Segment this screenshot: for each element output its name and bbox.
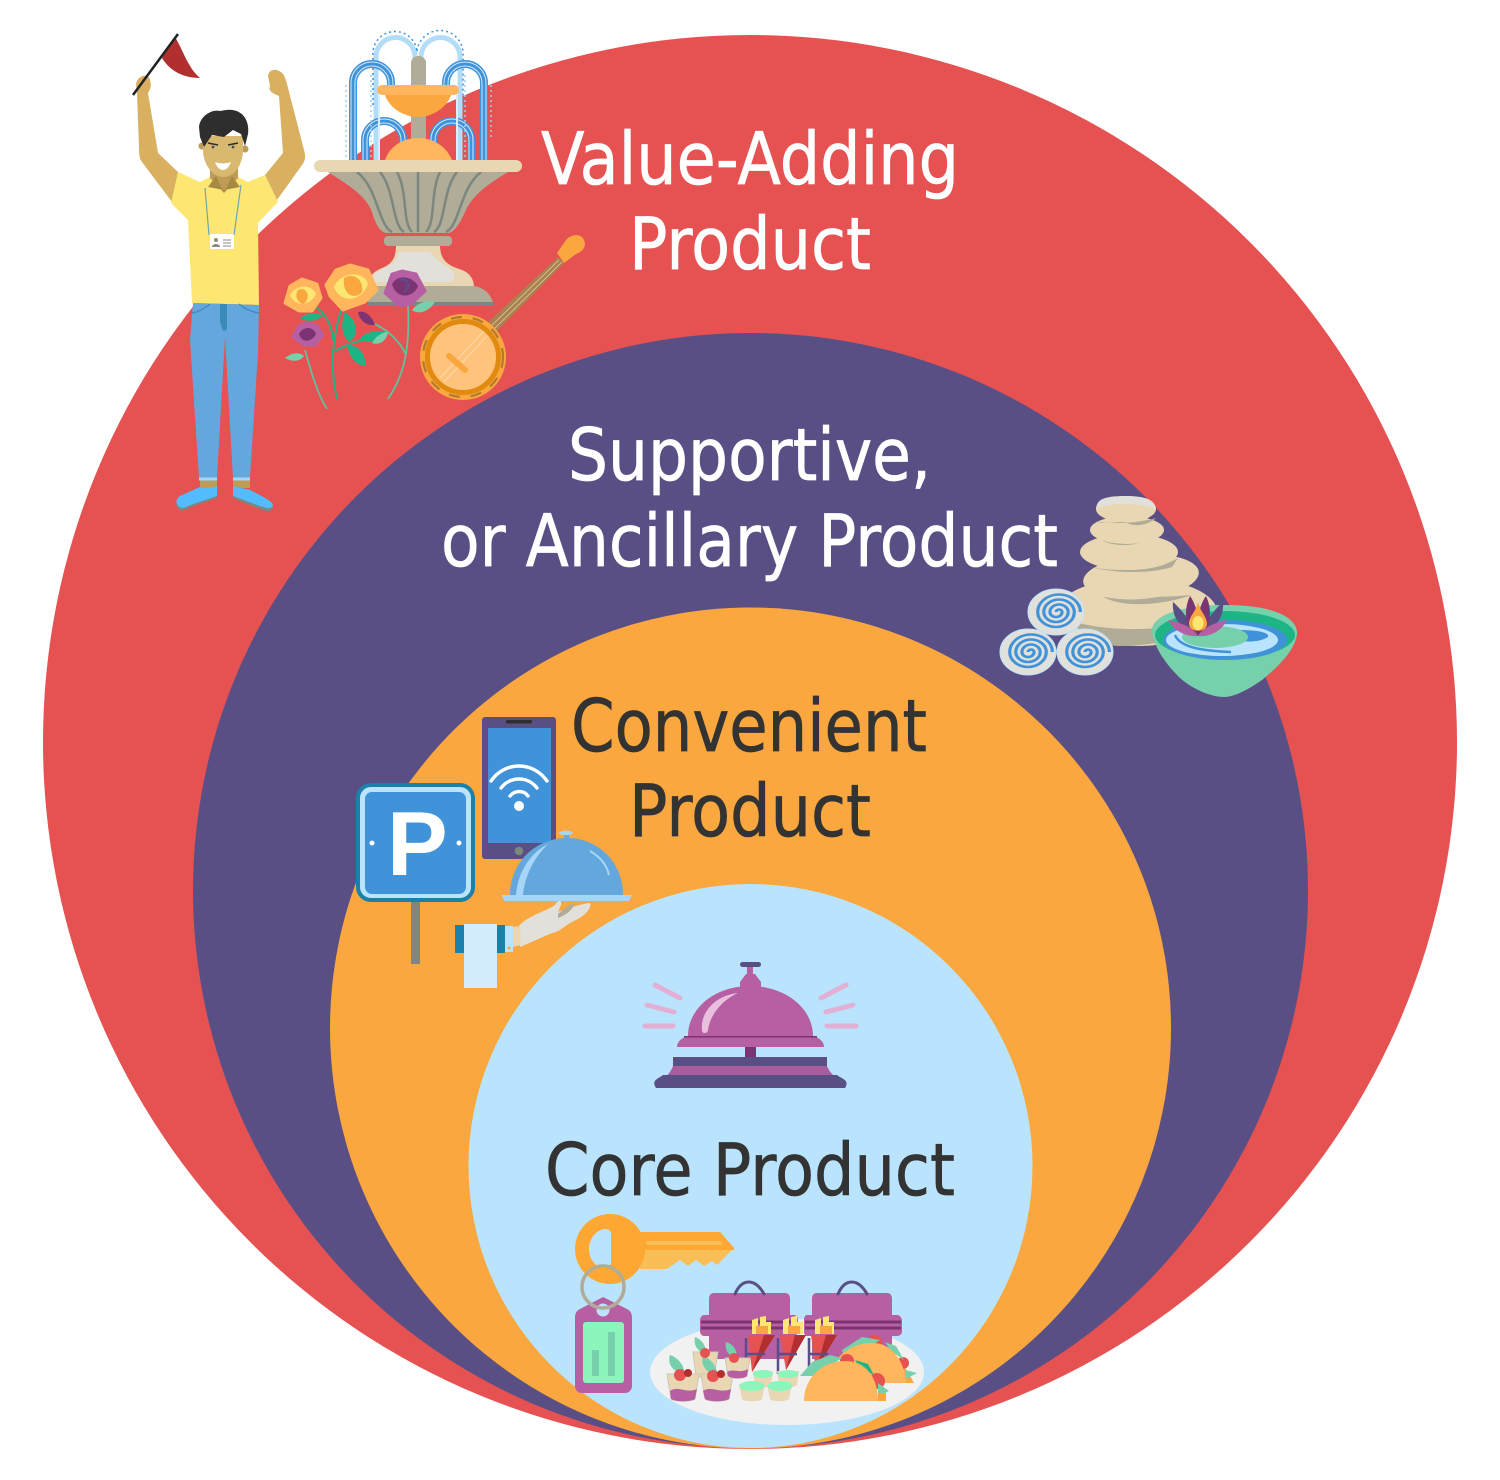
icon: roses (285, 265, 435, 409)
heading: Convenient Product: Convenient (571, 684, 927, 768)
green dips (739, 1370, 799, 1401)
heading: Value-Adding Product: Value-Adding (541, 117, 959, 201)
dessert cups (667, 1352, 750, 1401)
tacos (800, 1335, 917, 1401)
icon: spa stones (1057, 496, 1217, 646)
base (368, 245, 474, 287)
fountain column (411, 56, 426, 161)
heading: Value-Adding Product (541, 117, 959, 286)
circle: supportive product (193, 333, 1308, 1448)
icon: fountain (314, 30, 522, 306)
heading: Convenient Product (571, 684, 927, 853)
circle: convenient product (330, 608, 1171, 1448)
lower bowl (328, 172, 508, 233)
heading: Core Product: Core Product (545, 1128, 955, 1212)
upper bowl (384, 92, 452, 117)
fries cones (746, 1316, 837, 1374)
icon: smartphone with wifi (482, 717, 556, 859)
icon: bowl with lotus (1152, 596, 1297, 697)
icon: service bell (645, 962, 856, 1088)
sound rays (645, 985, 856, 1026)
heading: Convenient Product: Product (629, 769, 871, 853)
icon: parking sign: P (387, 794, 448, 895)
icon: man with flag (133, 34, 305, 511)
upper water arches (376, 38, 460, 160)
heading: Supportive, or Ancillary Product: Supportive, (568, 413, 931, 497)
bags (700, 1293, 902, 1359)
heading: Value-Adding Product: Product (629, 202, 871, 286)
icon: parking sign (358, 785, 473, 964)
circle: core product (468, 884, 1032, 1448)
icon: key tag (575, 1266, 632, 1393)
icon: catering plate (650, 1282, 924, 1425)
icon: waiter hand with cloche (455, 831, 632, 988)
icon: banjo (420, 235, 585, 400)
blue arches (353, 64, 484, 160)
icon: key (575, 1214, 734, 1284)
heading: Supportive, or Ancillary Product: or Ancillary Product (441, 499, 1058, 583)
heading: Supportive, or Ancillary Product (441, 413, 1058, 583)
icon: rolled towels (1000, 589, 1113, 675)
